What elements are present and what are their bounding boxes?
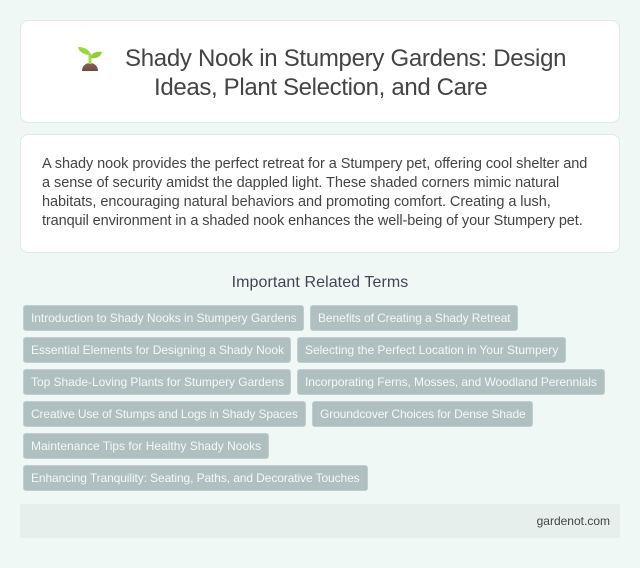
- related term tags: Introduction to Shady Nooks in Stumpery Gardens: [31, 311, 297, 325]
- related term tags: Groundcover Choices for Dense Shade: [320, 407, 526, 421]
- related term tags: Enhancing Tranquility: Seating, Paths, and Decorative Touches: [31, 471, 360, 485]
- related term tags: Selecting the Perfect Location in Your Stumpery: [305, 343, 558, 357]
- intro text panel: A shady nook provides the perfect retreat for a Stumpery pet, offering cool shelter and: [42, 156, 587, 172]
- related term tags: [23, 305, 605, 491]
- related term tags: Benefits of Creating a Shady Retreat: [318, 311, 511, 325]
- title: Shady Nook in Stumpery Gardens: Design: [125, 45, 566, 72]
- intro text panel: [20, 134, 620, 253]
- intro text panel: habitats, encouraging natural behaviors and promoting comfort. Creating a lush,: [42, 194, 551, 210]
- footer bar: [20, 504, 620, 538]
- intro text panel: a sense of security amidst the dappled light. These shaded corners mimic natural: [42, 175, 559, 191]
- related term tags: Creative Use of Stumps and Logs in Shady Spaces: [31, 407, 298, 421]
- header card: [20, 20, 620, 123]
- related term tags: Incorporating Ferns, Mosses, and Woodland Perennials: [305, 375, 597, 389]
- title: [125, 45, 566, 101]
- icon: seedling: [78, 47, 102, 71]
- intro text panel: tranquil environment in a shaded nook enhances the well-being of your Stumpery pet.: [42, 213, 583, 229]
- related term tags: Essential Elements for Designing a Shady Nook: [31, 343, 284, 357]
- title: Ideas, Plant Selection, and Care: [154, 74, 487, 101]
- footer credit: gardenot.com: [537, 514, 610, 528]
- section heading: Important Related Terms: [232, 274, 408, 291]
- related term tags: Top Shade-Loving Plants for Stumpery Gardens: [31, 375, 284, 389]
- related term tags: Maintenance Tips for Healthy Shady Nooks: [31, 439, 261, 453]
